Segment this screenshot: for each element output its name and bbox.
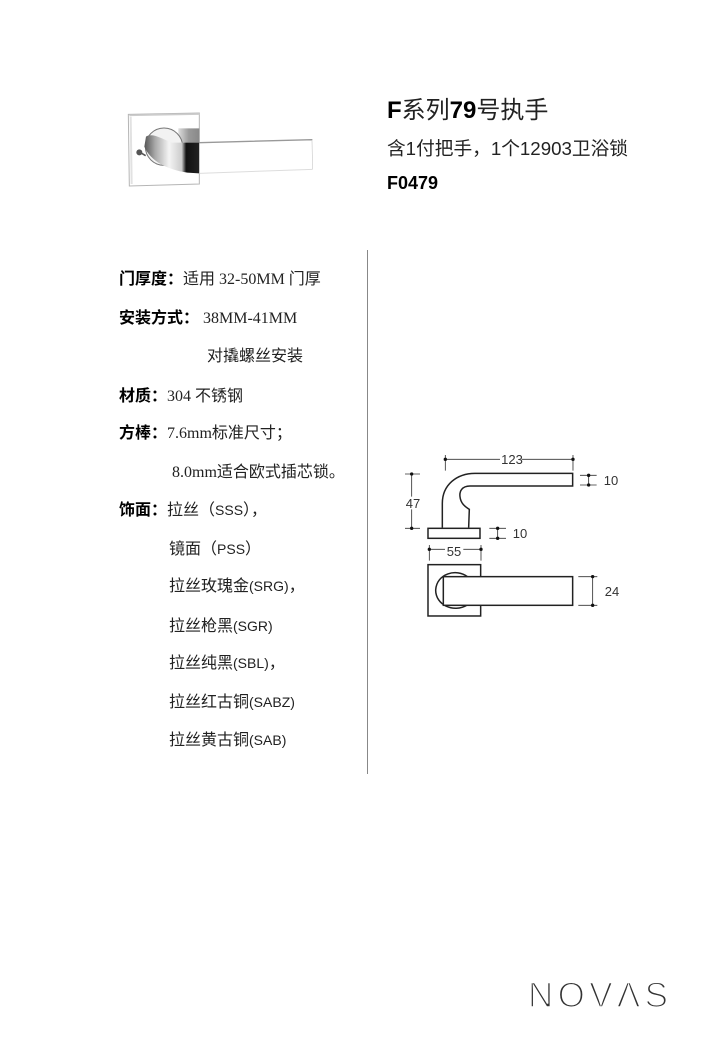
dimension labels: 10 [513, 526, 527, 541]
text: finish SSS: 饰面：拉丝（SSS）， [119, 502, 267, 519]
dimension lines [405, 455, 597, 605]
text: finish PSS: 镜面（PSS） [169, 541, 261, 558]
dimension labels: 47 [406, 496, 420, 511]
front view of handle [428, 565, 573, 616]
text: package contents: 含1付把手，1个12903卫浴锁 [387, 138, 628, 159]
dimension labels: 123 [501, 452, 523, 467]
heading: product title: F系列79号执手 [387, 97, 548, 124]
text: installation note: 对撬螺丝安装 [207, 348, 303, 365]
text: finish SABZ: 拉丝红古铜(SABZ) [169, 694, 295, 711]
text: square spindle: 方棒：7.6mm标准尺寸； [119, 425, 292, 442]
dimension end dots [410, 458, 594, 607]
dimension labels [406, 452, 619, 599]
text: finish SBL: 拉丝纯黑(SBL)， [169, 655, 285, 672]
text: finish SGR: 拉丝枪黑(SGR) [169, 618, 273, 635]
text: installation method: 安装方式： 38MM-41MM [119, 310, 297, 327]
logo: NOVAS: NOVΛS [528, 976, 668, 1015]
text: model number: F0479 [387, 173, 438, 193]
column divider [367, 250, 368, 774]
side view of handle [428, 473, 573, 538]
text: finish SRG: 拉丝玫瑰金(SRG)， [169, 578, 305, 595]
text: finish SAB: 拉丝黄古铜(SAB) [169, 732, 286, 749]
icon: product photo of door handle [128, 112, 313, 186]
text: spindle note: 8.0mm适合欧式插芯锁。 [172, 464, 345, 481]
text: material: 材质：304 不锈钢 [119, 388, 243, 405]
dimension labels: 55 [447, 544, 461, 559]
text: door thickness: 门厚度：适用 32-50MM 门厚 [119, 271, 321, 288]
dimension labels: 24 [605, 584, 619, 599]
dimension labels: 10 [604, 473, 618, 488]
